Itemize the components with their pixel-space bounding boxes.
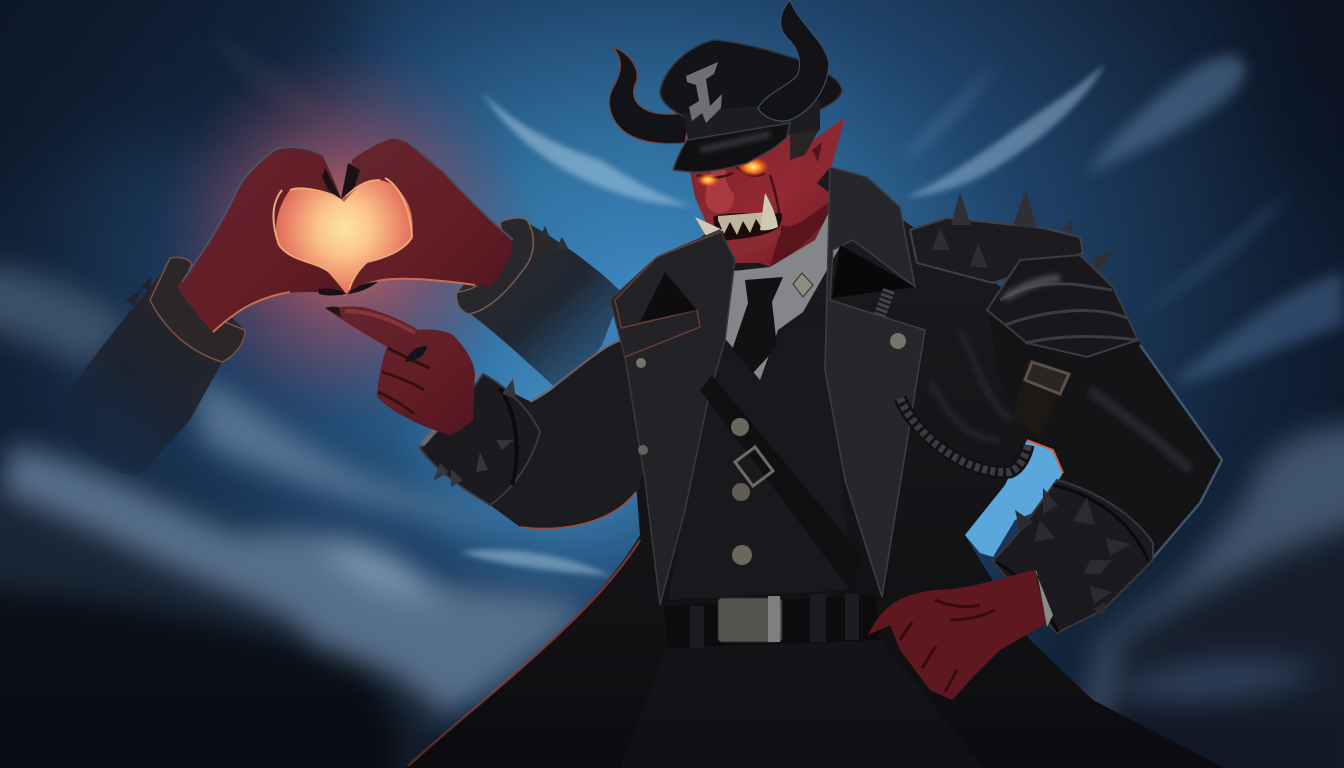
left hand of the heart [177,147,347,333]
left and lower blue clouds [0,260,590,720]
glowing heart light [274,178,415,296]
pointing arm sleeve [420,338,648,528]
shoulder armour [910,190,1138,357]
coat red rim light [408,540,640,766]
mouth with teeth [713,213,782,243]
floating right sleeve [456,217,622,396]
lower coat front [620,640,985,768]
orange rim light in gap [1027,440,1063,473]
head [690,117,845,267]
belt with buckle [664,594,880,648]
spiked right cuff [993,480,1153,633]
soft blue clouds upper right [210,30,1344,385]
right hand of the heart [341,138,513,295]
hand on hip [868,570,1053,700]
dark storm clouds bottom left [0,480,440,768]
vest and inner torso [668,320,850,600]
braided chain [900,398,1028,472]
dark clouds upper corners [0,0,1344,260]
pointing hand [325,306,475,435]
bright sky patch [380,260,740,620]
cloud wisps in the sky [460,65,1105,576]
arm strap with buckle [1013,360,1070,437]
vignette at lower edge [0,720,1344,768]
clouds right side [1060,424,1344,768]
vest buttons and diagonal strap [636,333,906,590]
coat lapels [610,167,925,605]
coat skirt and torso [405,167,1225,768]
floating left sleeve [56,257,245,475]
collar pin [793,273,813,297]
sky gap between arm and body [965,440,1063,557]
braided cord on chest [880,290,889,315]
necktie [732,277,783,373]
shirt collar [722,190,855,380]
glowing eyes [697,173,719,187]
right arm and sleeve [930,255,1222,600]
red glow behind heart [110,50,580,420]
officer cap with horns [609,0,842,172]
